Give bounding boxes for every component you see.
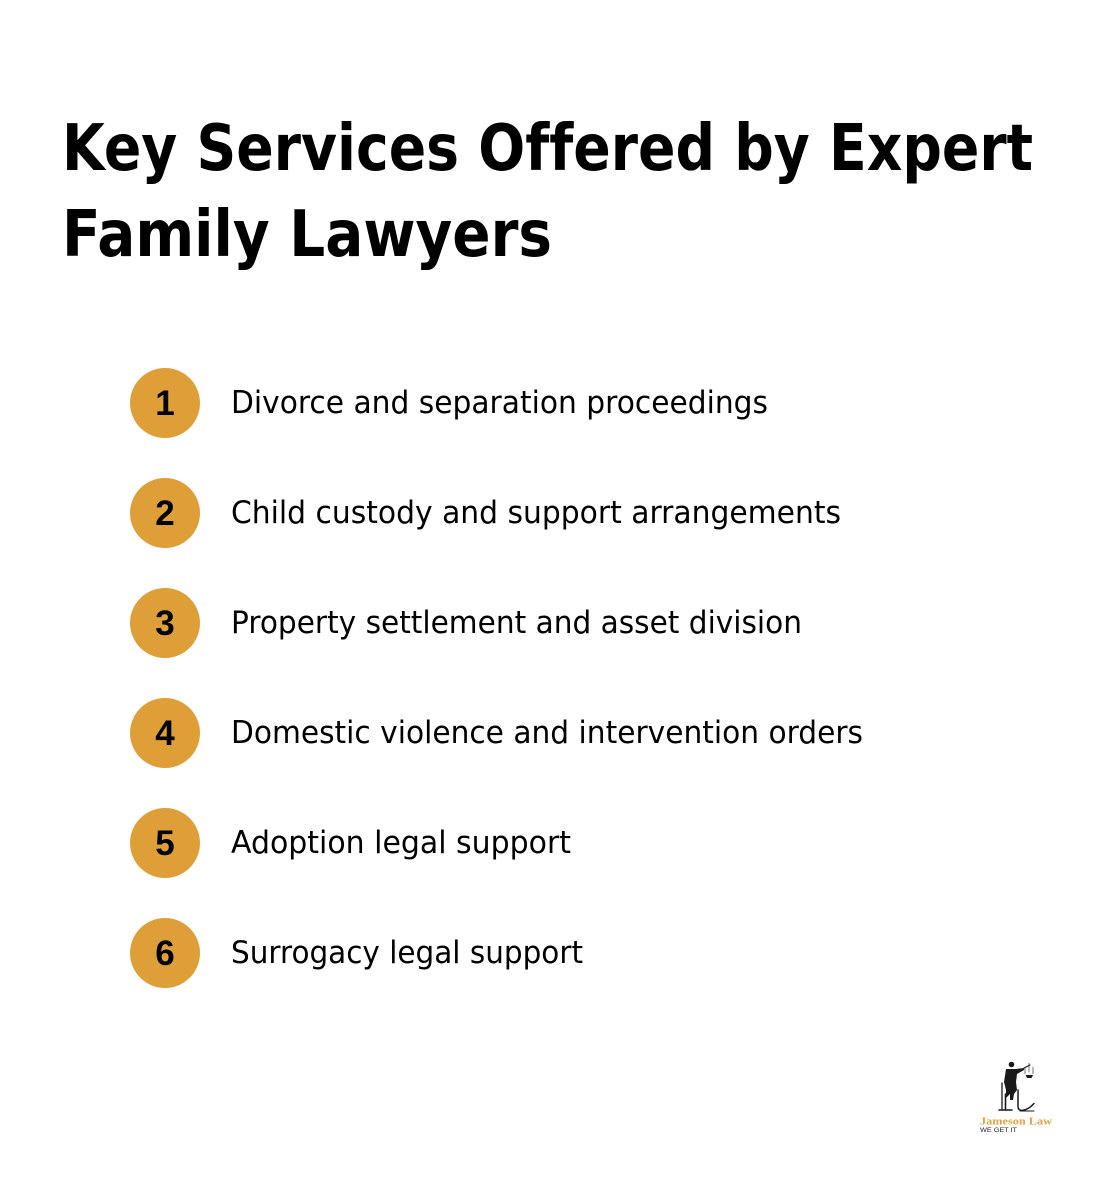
- item 4: domestic violence: [130, 698, 863, 768]
- item 3: property: 3: [155, 604, 175, 643]
- item 3: property: [130, 588, 802, 658]
- item 1: divorce: Divorce and separation proceedings: [231, 385, 768, 421]
- item 5: adoption: 5: [155, 824, 175, 863]
- item 3: property: Property settlement and asset division: [231, 605, 802, 641]
- item 4: domestic violence: 4: [155, 714, 175, 753]
- item 4: domestic violence: Domestic violence and intervention orders: [231, 715, 863, 751]
- icon: lady justice: [999, 1062, 1034, 1111]
- logo name: Jameson Law: [980, 1116, 1052, 1128]
- item 2: child custody: [130, 478, 841, 548]
- item 6: surrogacy: [130, 918, 583, 988]
- list of services: [130, 368, 863, 988]
- item 5: adoption: [130, 808, 571, 878]
- logo tagline: WE GET IT: [980, 1128, 1017, 1134]
- item 1: divorce: 1: [155, 384, 175, 423]
- item 1: divorce: [130, 368, 768, 438]
- logo: Jameson Law: [980, 1062, 1052, 1134]
- item 2: child custody: Child custody and support arrangements: [231, 495, 841, 531]
- item 6: surrogacy: 6: [155, 934, 175, 973]
- item 6: surrogacy: Surrogacy legal support: [231, 935, 583, 971]
- title: [62, 112, 1033, 272]
- title: Family Lawyers: [62, 198, 552, 272]
- item 2: child custody: 2: [155, 494, 175, 533]
- item 5: adoption: Adoption legal support: [231, 825, 571, 861]
